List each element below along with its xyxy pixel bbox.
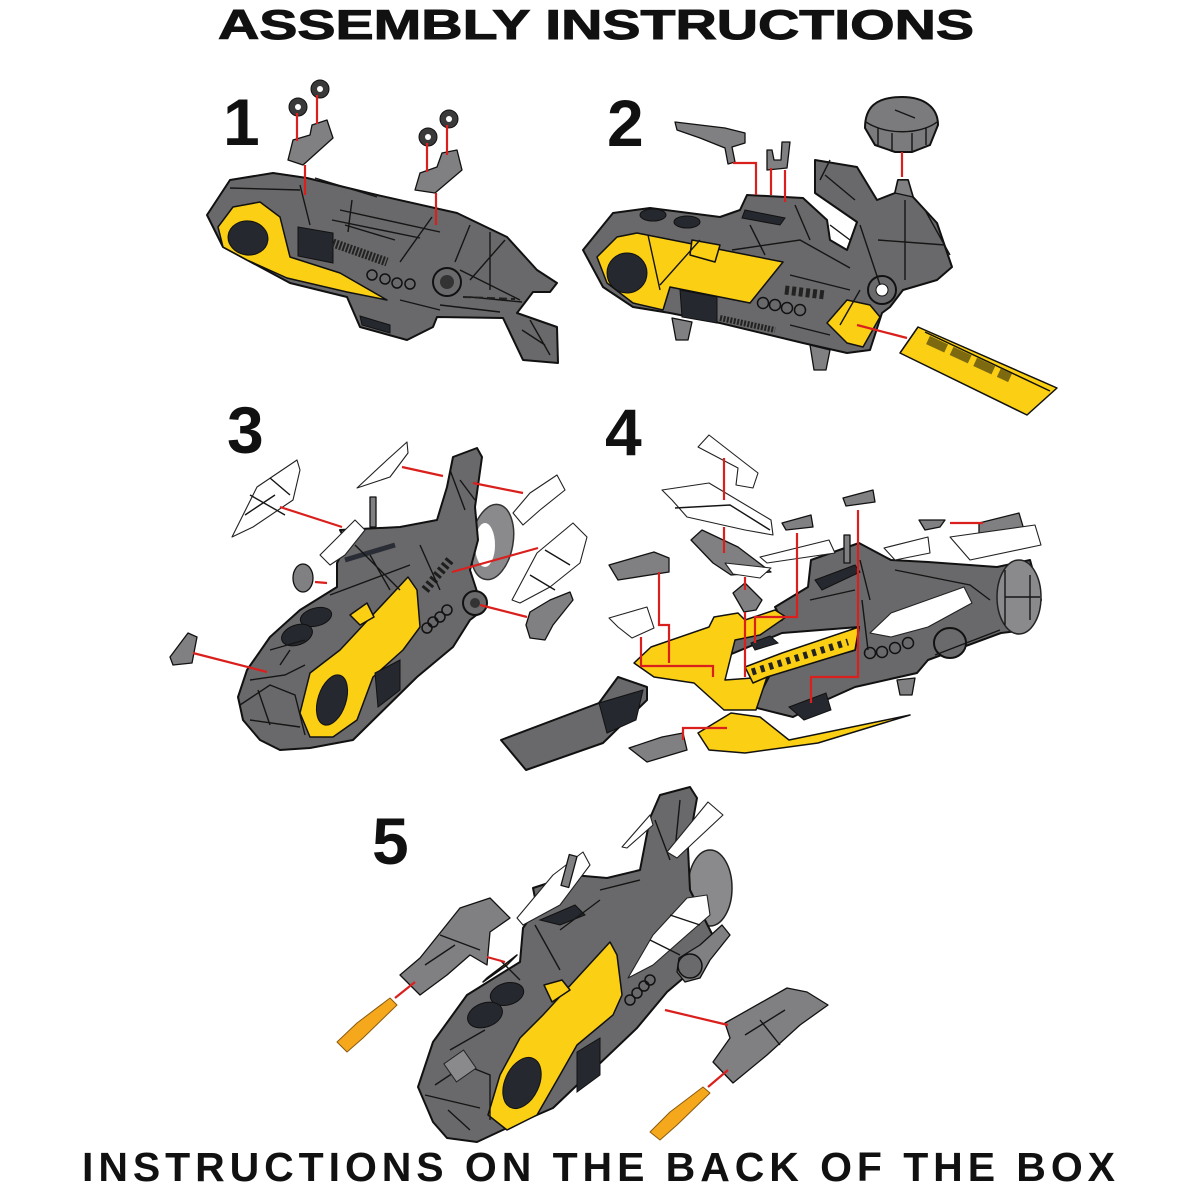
step number 1: 1 bbox=[223, 85, 260, 159]
step 3 parts bbox=[170, 442, 587, 672]
step 2 submarine bbox=[583, 160, 952, 370]
step 4 submarine bbox=[634, 543, 1041, 720]
step 1 parts bbox=[288, 80, 462, 225]
step number 4: 4 bbox=[605, 395, 642, 469]
step number 3: 3 bbox=[227, 393, 264, 467]
footer note: INSTRUCTIONS ON THE BACK OF THE BOX bbox=[82, 1144, 1115, 1190]
step number 2: 2 bbox=[607, 86, 644, 160]
step number 5: 5 bbox=[372, 804, 409, 878]
step 4 parts bbox=[501, 435, 1041, 770]
step 5 parts bbox=[337, 802, 828, 1140]
step 5 submarine bbox=[418, 787, 732, 1142]
title: ASSEMBLY INSTRUCTIONS bbox=[218, 1, 974, 48]
step 1 submarine bbox=[207, 173, 558, 363]
step 3 submarine bbox=[238, 448, 519, 750]
step 2 parts bbox=[675, 97, 1057, 415]
